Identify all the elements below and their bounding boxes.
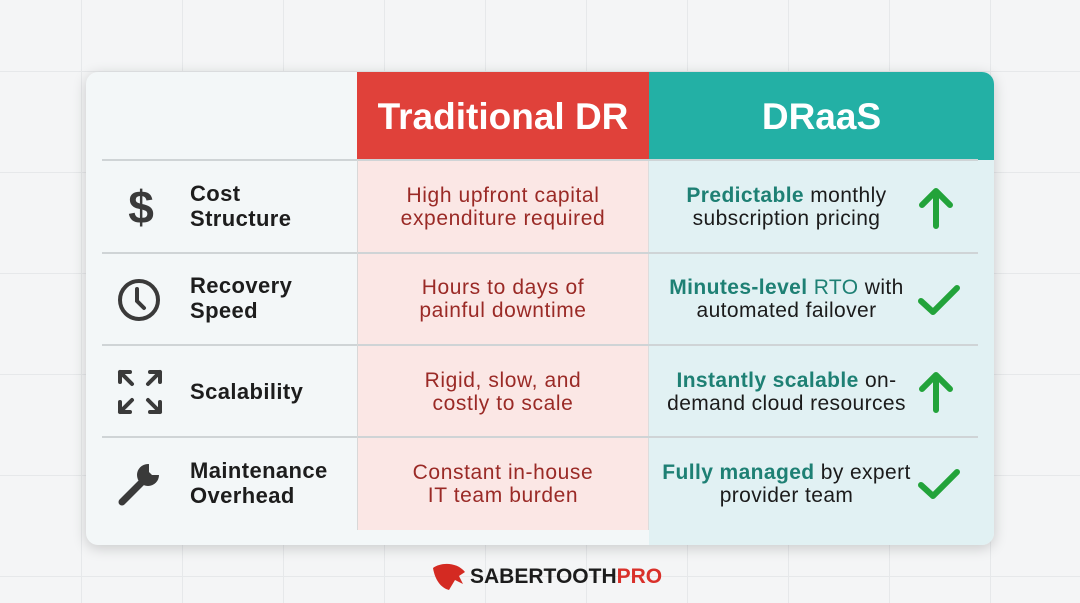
text: traditional scalability xyxy=(425,369,581,415)
draas column body xyxy=(649,160,994,545)
text: traditional speed: painful downtime xyxy=(419,299,587,322)
text: traditional cost: expenditure required xyxy=(401,207,605,230)
icon: wrench xyxy=(118,464,159,506)
label: Cost Structure: Cost xyxy=(190,181,240,206)
icon: up arrow xyxy=(919,188,953,229)
text: traditional cost: High upfront capital xyxy=(407,184,599,207)
icon: dollar: $ xyxy=(128,181,154,233)
icon: sabertooth head xyxy=(433,564,465,590)
icon: up arrow xyxy=(919,372,953,413)
text: traditional scalability: Rigid, slow, and xyxy=(425,369,581,392)
icon: clock xyxy=(118,279,160,321)
text: draas cost: subscription pricing xyxy=(693,207,880,230)
icon: check xyxy=(918,285,960,315)
text: draas scalability xyxy=(667,369,906,415)
label: Recovery Speed: Recovery xyxy=(190,273,292,298)
label: Cost Structure: Structure xyxy=(190,206,291,231)
text: draas speed: Minutes-level RTO with xyxy=(669,276,904,299)
label: Maintenance Overhead: Overhead xyxy=(190,483,295,508)
header: Traditional DR: Traditional DR xyxy=(378,96,628,137)
text: draas maintenance: provider team xyxy=(720,484,853,507)
traditional column body xyxy=(357,160,649,530)
text: traditional maintenance: IT team burden xyxy=(428,484,578,507)
header: DRaaS xyxy=(649,72,994,160)
label: Maintenance Overhead: Maintenance xyxy=(190,458,328,483)
text: traditional speed: Hours to days of xyxy=(422,276,584,299)
text: draas speed xyxy=(669,276,904,322)
text: traditional maintenance xyxy=(413,461,593,507)
text: draas maintenance xyxy=(662,461,911,507)
text: draas scalability: demand cloud resources xyxy=(667,392,906,415)
icon: check xyxy=(918,469,960,499)
comparison card xyxy=(86,72,994,545)
text: draas speed: automated failover xyxy=(697,299,876,322)
label: Recovery Speed: Speed xyxy=(190,298,258,323)
text: traditional speed xyxy=(419,276,587,322)
text: draas maintenance: Fully managed by expert xyxy=(662,461,911,484)
header: Traditional DR xyxy=(357,72,649,160)
header: DRaaS: DRaaS xyxy=(762,96,881,137)
text: traditional maintenance: Constant in-house xyxy=(413,461,593,484)
text: draas cost xyxy=(686,184,887,230)
text: traditional cost xyxy=(401,184,605,230)
text: draas scalability: Instantly scalable on- xyxy=(676,369,897,392)
icon: expand arrows xyxy=(118,370,162,414)
label: Cost Structure xyxy=(190,181,291,231)
label: Recovery Speed xyxy=(190,273,292,323)
text: traditional scalability: costly to scale xyxy=(433,392,573,415)
text: draas cost: Predictable monthly xyxy=(686,184,887,207)
label: Maintenance Overhead xyxy=(190,458,328,508)
label: Scalability: Scalability xyxy=(190,379,303,404)
logo: SabertoothPro: SABERTOOTHPRO xyxy=(470,565,662,588)
